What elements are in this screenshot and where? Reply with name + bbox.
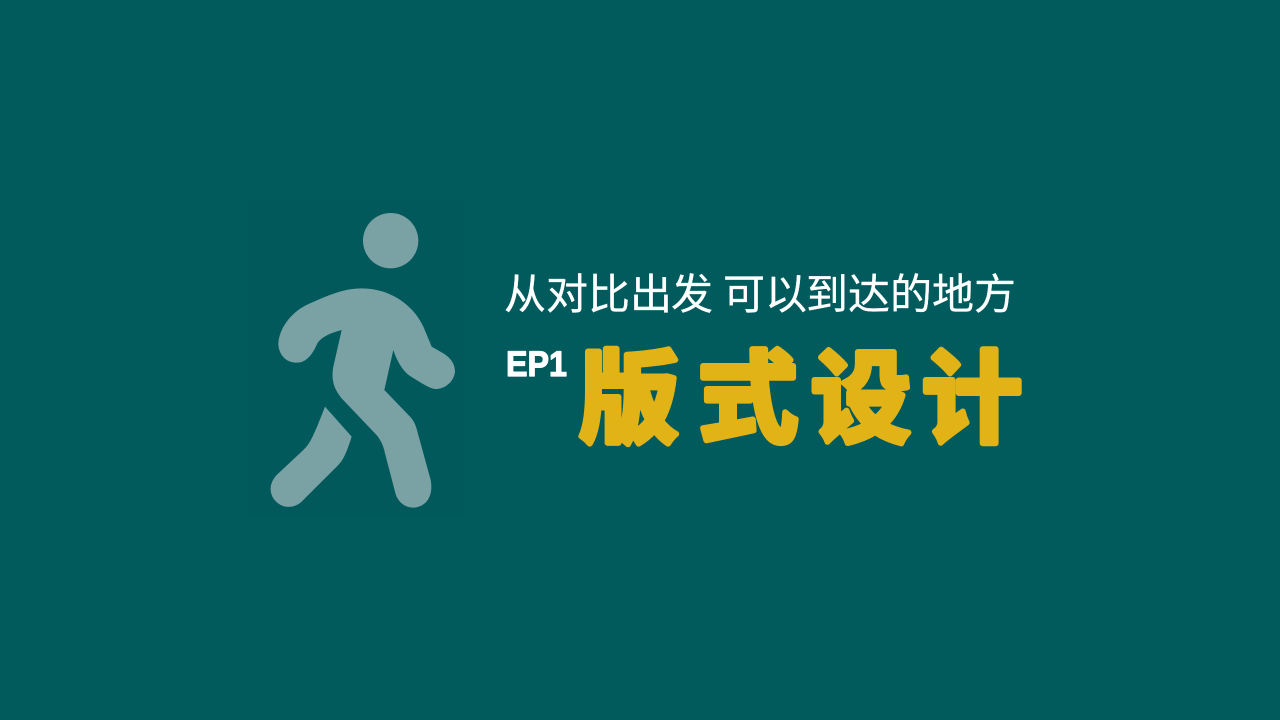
main title [579,344,1022,456]
subtitle: 对 [546,271,588,318]
subtitle: 发 [671,271,713,318]
subtitle: 地 [932,271,974,318]
subtitle: 以 [765,271,807,318]
main title: 版 [579,344,679,456]
subtitle: 比 [588,271,630,318]
episode label: EP1 [506,345,567,384]
icon: walking person [248,200,465,518]
subtitle: 出 [630,271,672,318]
subtitle: 的 [890,271,932,318]
subtitle [504,271,1016,318]
main title: 计 [922,344,1022,456]
main title: 式 [698,344,798,456]
main title: 设 [811,344,911,456]
subtitle: 到 [806,271,848,318]
subtitle: 从 [504,271,546,318]
subtitle: 达 [848,271,890,318]
subtitle: 方 [974,271,1016,318]
subtitle: 可 [723,271,765,318]
